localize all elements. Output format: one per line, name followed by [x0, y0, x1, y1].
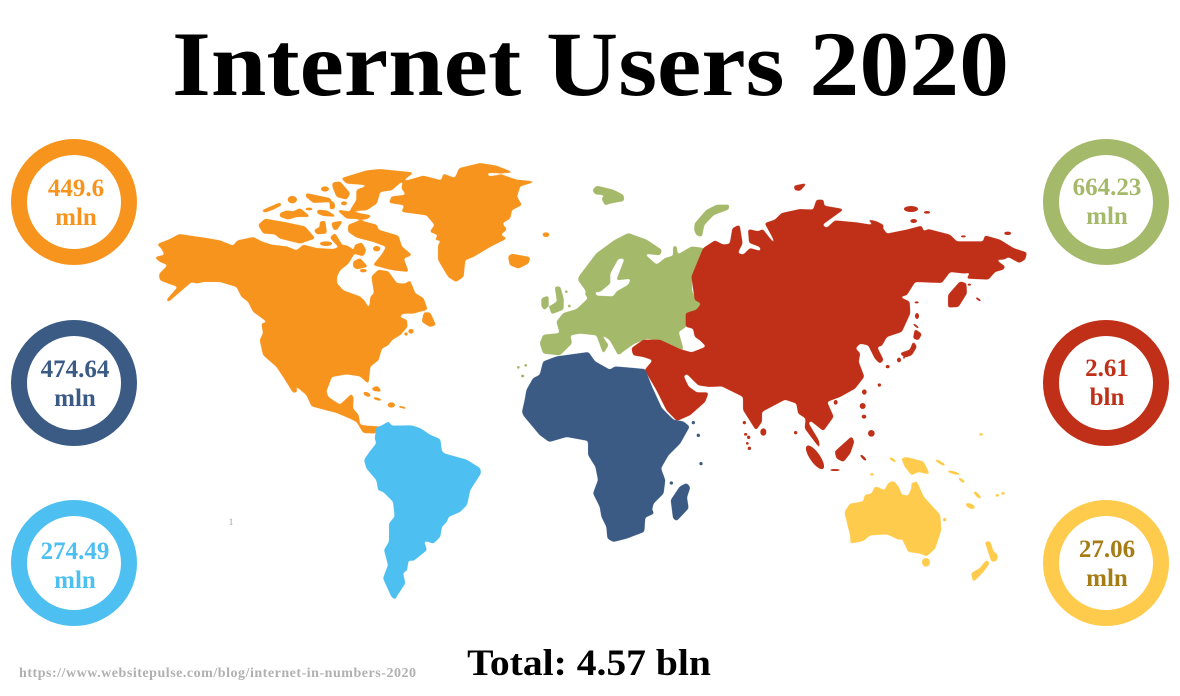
stat ring: Africa 474.64 mln: mln — [54, 385, 96, 412]
stat ring: Africa 474.64 mln: 474.64 — [41, 356, 110, 383]
title: Internet Users 2020 — [172, 13, 1009, 115]
stat ring: Oceania 27.06 mln — [1051, 508, 1161, 618]
stat ring: Asia 2.61 bln — [1051, 328, 1161, 438]
Europe small islands — [517, 291, 570, 377]
North America small islands — [288, 187, 549, 409]
region: North America — [155, 163, 549, 433]
stat ring: Europe 664.23 mln — [1051, 147, 1161, 257]
region: Asia — [632, 183, 1027, 471]
Africa landmass and Madagascar — [522, 352, 690, 542]
region: Europe — [517, 186, 729, 377]
stat ring: South America 274.49 mln: 274.49 — [41, 538, 109, 565]
stray footnote mark: 1 — [229, 517, 233, 527]
Africa small islands — [670, 421, 702, 484]
North America landmass — [155, 163, 535, 433]
total: Total: 4.57 bln — [467, 643, 711, 684]
stat ring: South America 274.49 mln — [19, 508, 129, 618]
stat ring: Asia 2.61 bln: bln — [1090, 384, 1124, 411]
Asia small islands — [743, 206, 1011, 471]
stat ring: Europe 664.23 mln: mln — [1086, 203, 1128, 230]
region: Africa — [522, 352, 702, 542]
Australia, New Guinea and New Zealand — [845, 457, 998, 582]
Europe landmass — [540, 186, 729, 355]
stat ring: North America 449.6 mln: 449.6 — [48, 175, 104, 202]
stat ring: Europe 664.23 mln: 664.23 — [1073, 174, 1141, 201]
world map — [155, 163, 1027, 599]
stat ring: Oceania 27.06 mln: 27.06 — [1079, 536, 1135, 563]
Oceania small islands — [871, 433, 1004, 566]
stat ring: North America 449.6 mln: mln — [55, 204, 97, 231]
stat ring: South America 274.49 mln: mln — [54, 567, 96, 594]
stat ring: Oceania 27.06 mln: mln — [1086, 565, 1128, 592]
stat ring: Asia 2.61 bln: 2.61 — [1085, 355, 1129, 382]
stat ring: North America 449.6 mln — [19, 147, 129, 257]
source url: https://www.websitepulse.com/blog/internet-in-numbers-2020 — [19, 666, 416, 681]
stat ring: Africa 474.64 mln — [19, 328, 129, 438]
Asia landmass — [632, 183, 1027, 462]
region: Oceania — [845, 433, 1004, 582]
region: South America — [364, 422, 481, 599]
